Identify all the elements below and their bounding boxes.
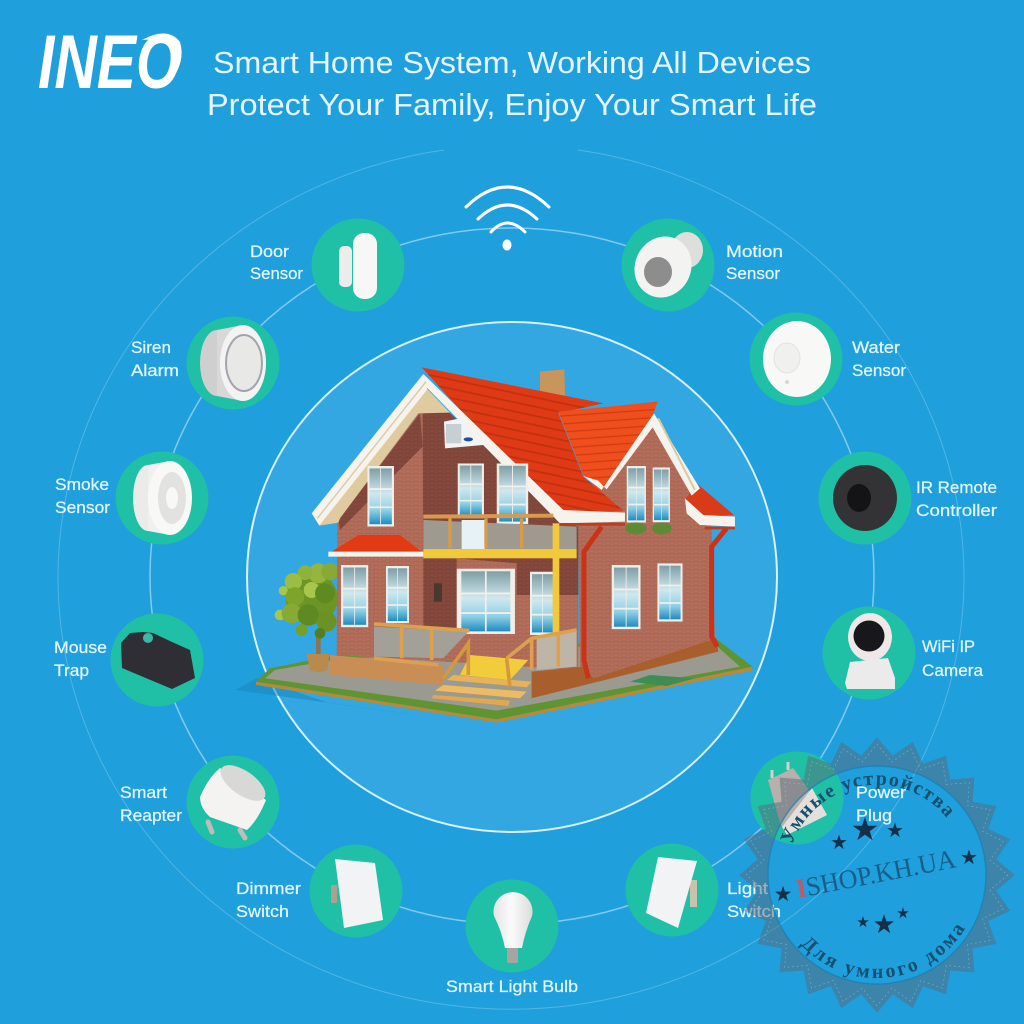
device: door sensor — [250, 218, 404, 312]
house illustration — [235, 367, 753, 723]
side roof — [685, 483, 734, 517]
wall lamp — [434, 583, 442, 602]
stamp stars: ★ — [774, 882, 792, 906]
stamp curved text: Для умного дома — [798, 925, 965, 978]
stamp shop name: ISHOP.KH.UA — [793, 843, 959, 904]
device: mouse trap — [54, 614, 204, 706]
chimney — [540, 369, 565, 400]
stamp stars: ★ — [872, 910, 896, 940]
device: IR remote controller — [818, 452, 998, 544]
label: motion sensor: Motion — [726, 243, 783, 261]
label: light switch: Light — [727, 880, 768, 898]
label: dimmer switch: Dimmer — [236, 880, 302, 898]
label: motion sensor — [726, 243, 783, 283]
title: Smart Home System, Working All Devices — [213, 45, 811, 80]
label: smart repeater: Smart — [120, 784, 167, 802]
stamp stars — [774, 810, 978, 940]
label: smart repeater: Reapter — [120, 807, 183, 825]
icon: wifi — [466, 187, 549, 250]
device: siren alarm — [131, 316, 280, 410]
stamp curved text — [780, 774, 965, 978]
label: smoke sensor — [55, 476, 111, 517]
device: smart repeater — [120, 756, 280, 848]
stamp stars: ★ — [851, 810, 879, 848]
label: mouse trap: Mouse — [54, 639, 107, 657]
label: siren alarm: Siren — [131, 339, 171, 357]
outer decorative ring — [58, 150, 964, 1009]
label: IR remote controller — [916, 479, 998, 520]
label: door sensor: Sensor — [250, 265, 304, 283]
label: mouse trap — [54, 639, 107, 680]
title: Protect Your Family, Enjoy Your Smart Life — [207, 87, 817, 122]
label: power plug — [856, 784, 907, 825]
device: light switch — [626, 844, 781, 936]
stairs — [432, 643, 532, 706]
label: smart light bulb: Smart Light Bulb — [446, 978, 578, 996]
label: smoke sensor: Smoke — [55, 476, 109, 494]
stamp stars: ★ — [830, 830, 848, 854]
stone foundation — [330, 655, 443, 685]
label: power plug: Power — [856, 784, 907, 802]
front wall — [337, 410, 578, 670]
stamp stars: ★ — [896, 904, 910, 922]
label: dimmer switch — [236, 880, 302, 921]
stamp stars: ★ — [856, 913, 870, 931]
device ring — [150, 228, 874, 924]
watermark stamp — [740, 738, 1014, 1012]
label: IR remote controller: Controller — [916, 502, 998, 520]
stamp ring — [739, 737, 1015, 1013]
gable soffit — [319, 388, 450, 526]
device: smoke sensor — [55, 452, 208, 544]
label: water sensor: Water — [852, 339, 901, 357]
title — [207, 45, 817, 122]
label: siren alarm — [131, 339, 179, 380]
stamp stars: ★ — [960, 845, 978, 869]
label: wifi ip camera — [922, 638, 984, 680]
label: door sensor — [250, 243, 304, 283]
device: dimmer switch — [236, 844, 402, 938]
device: motion sensor — [622, 218, 783, 312]
logo: INE — [38, 20, 138, 105]
stamp stars: ★ — [886, 818, 904, 842]
device: power plug — [750, 752, 844, 844]
label: IR remote controller: IR Remote — [916, 479, 997, 497]
wall shadows — [338, 413, 423, 530]
label: water sensor: Sensor — [852, 362, 907, 380]
porch canopy — [328, 535, 423, 557]
main roof — [422, 367, 623, 515]
label: door sensor: Door — [250, 243, 290, 261]
right wall — [578, 425, 715, 678]
porch railing — [374, 624, 577, 670]
label: smoke sensor: Sensor — [55, 499, 111, 517]
air conditioner — [444, 418, 483, 448]
roof fascia — [312, 374, 735, 527]
device: wifi ip camera — [822, 606, 984, 700]
label: wifi ip camera: Camera — [922, 662, 984, 680]
flower boxes — [625, 522, 672, 534]
label: light switch: Switch — [727, 903, 781, 921]
label: wifi ip camera: WiFi IP — [922, 638, 975, 656]
label: smart repeater — [120, 784, 183, 825]
central circle — [247, 322, 777, 832]
device: water sensor — [750, 312, 907, 406]
label: light switch — [727, 880, 781, 921]
stamp curved text: Умные устройства — [780, 774, 952, 842]
gutter downspouts — [584, 527, 727, 678]
balcony — [423, 516, 577, 667]
label: dimmer switch: Switch — [236, 903, 289, 921]
windows — [341, 463, 683, 635]
dormer roof — [558, 402, 658, 492]
device: smart light bulb — [446, 880, 578, 996]
label: water sensor — [852, 339, 907, 380]
label: mouse trap: Trap — [54, 662, 89, 680]
label: motion sensor: Sensor — [726, 265, 781, 283]
house ground — [235, 637, 753, 723]
tree — [275, 563, 339, 672]
label: siren alarm: Alarm — [131, 362, 179, 380]
label: power plug: Plug — [856, 807, 892, 825]
logo: O — [136, 20, 180, 105]
